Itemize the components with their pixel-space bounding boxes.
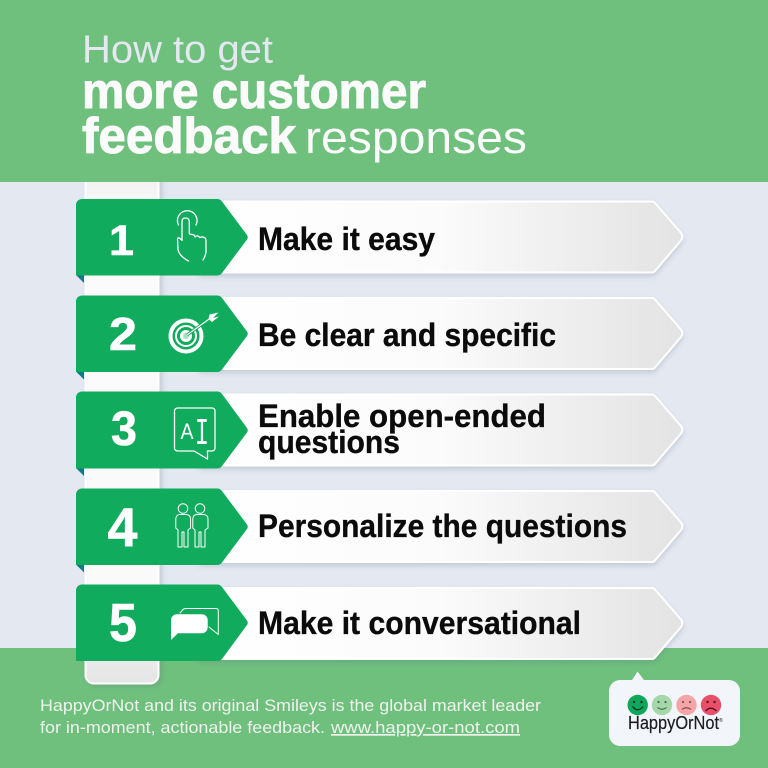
title: How to get [82,28,273,72]
step 2 number: 2 [109,308,137,360]
step 3 number: 3 [111,403,137,456]
header band [0,0,768,182]
step 4 label arrow [200,491,682,562]
smiley: very unhappy [701,695,721,715]
step 1 green tab [76,199,248,276]
bottom green band [0,648,768,768]
step 3 label: questions [258,424,400,460]
icon: AI speech bubble: I [195,413,209,456]
step 2 label arrow [200,298,682,369]
footer text: for in-moment, actionable feedback. [40,718,325,737]
step 1 [76,199,682,283]
step 4 [76,488,682,572]
smiley: very happy [628,695,648,715]
footer text: www.happy-or-not.com [330,718,520,737]
icon: pointing hand [177,211,206,261]
step 1 label arrow [200,202,682,272]
step 1 fold [76,275,84,283]
footer text: HappyOrNot and its original Smileys is the global market leader [40,696,541,715]
step 4 green tab [76,488,248,565]
step 5 [76,584,682,661]
step 3 label [258,398,546,460]
step 5 number: 5 [109,593,137,653]
step 5 green tab [76,584,248,661]
icon: target with arrow [170,312,219,352]
smiley: happy [652,695,672,715]
step 1 label: Make it easy [258,221,435,257]
icon: two people [176,504,208,547]
logo speech bubble [609,672,740,746]
step 3 [76,391,682,476]
step 2 [76,295,682,380]
step 4 fold [76,564,84,572]
logo badge [609,672,740,746]
step 2 green tab [76,295,248,372]
icon: chat bubbles [171,608,218,640]
step 1 number: 1 [109,217,134,265]
title: responses [305,112,527,163]
step 2 fold [76,372,84,380]
step 5 label arrow [200,588,682,659]
step 3 fold [76,468,84,476]
step 5 label: Make it conversational [258,605,581,641]
step 3 label arrow [200,394,682,466]
title: feedback [82,108,296,164]
step 2 label: Be clear and specific [258,317,556,353]
icon: AI speech bubble [174,408,215,459]
smiley: unhappy [676,695,697,715]
step 3 green tab [76,391,248,469]
footer text [40,696,541,737]
title: more customer [82,63,426,119]
step 4 number: 4 [108,496,138,558]
title [82,28,527,164]
step 4 label: Personalize the questions [258,508,627,544]
icon: AI speech bubble: A [180,419,194,444]
logo wordmark: HappyOrNot [628,713,719,733]
step 3 label: Enable open-ended [258,398,546,434]
registered mark: ® [719,717,723,724]
vertical spine behind steps [86,170,158,684]
